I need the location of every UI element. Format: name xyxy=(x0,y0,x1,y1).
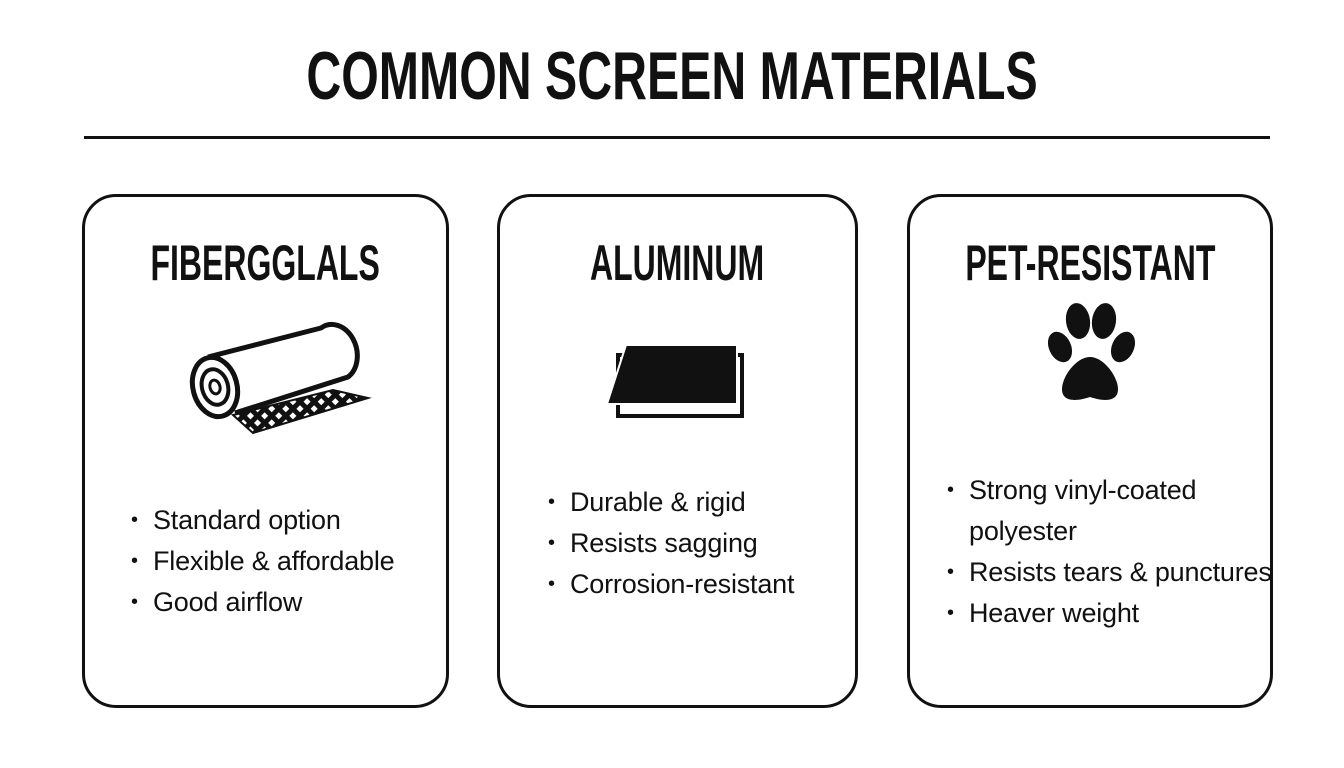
icon: aluminum sheets xyxy=(608,346,744,418)
bullet list: aluminum: Durable & rigid xyxy=(570,487,746,517)
bullet list: aluminum: Corrosion-resistant xyxy=(570,569,794,599)
bullet list: pet-resistant xyxy=(948,475,1272,628)
bullet list: fiberglass: Standard option xyxy=(153,505,341,535)
title: COMMON SCREEN MATERIALS xyxy=(306,38,1038,114)
bullet list: pet-resistant: polyester xyxy=(969,516,1077,546)
icon: paw xyxy=(1048,303,1136,400)
bullet list: pet-resistant: Strong vinyl-coated xyxy=(969,475,1196,505)
bullet list: pet-resistant: Heaver weight xyxy=(969,598,1139,628)
bullet list: pet-resistant: Resists tears & punctures xyxy=(969,557,1272,587)
panel: aluminum xyxy=(497,194,858,708)
panel: fiberglass xyxy=(82,194,449,708)
bullet list: fiberglass xyxy=(132,505,394,617)
heading: aluminum: ALUMINUM xyxy=(590,235,765,291)
bullet list: aluminum: Resists sagging xyxy=(570,528,758,558)
bullet list: fiberglass: Flexible & affordable xyxy=(153,546,394,576)
panel: pet-resistant xyxy=(907,194,1273,708)
heading: fiberglass: FIBERGGLALS xyxy=(151,235,380,291)
icon: screen roll xyxy=(190,322,372,434)
heading: pet-resistant: PET-RESISTANT xyxy=(965,235,1215,291)
bullet list: fiberglass: Good airflow xyxy=(153,587,302,617)
bullet list: aluminum xyxy=(548,487,794,599)
